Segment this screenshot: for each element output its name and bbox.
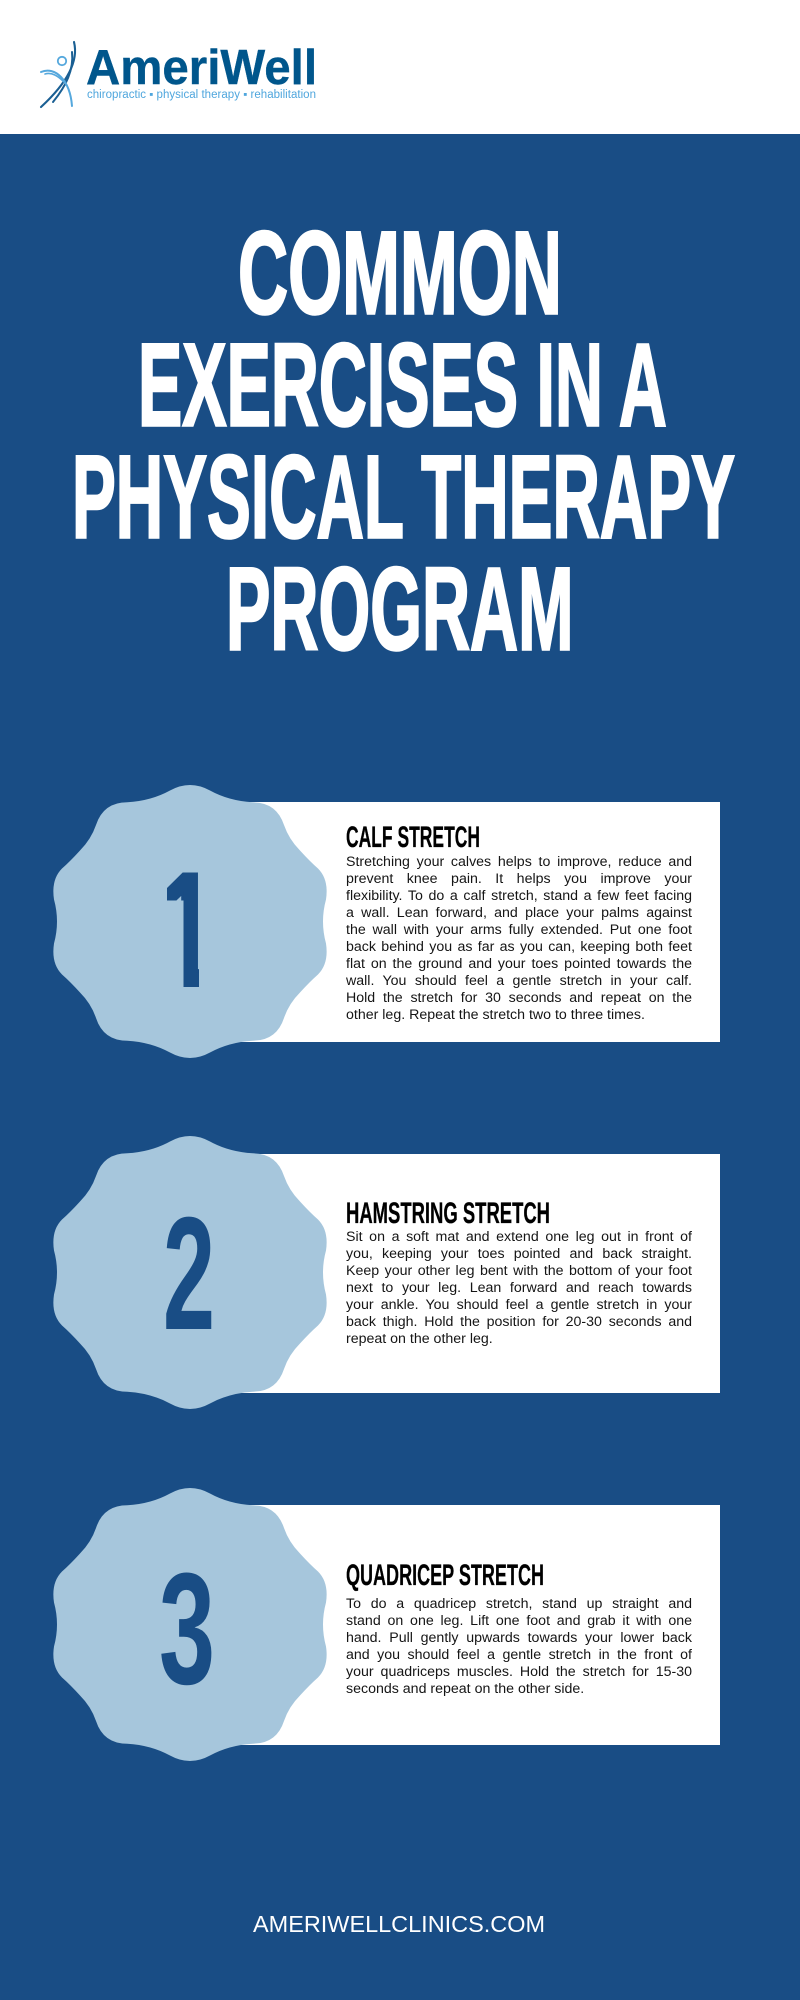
heading: HAMSTRING STRETCH bbox=[346, 1197, 550, 1230]
body text: your quadriceps muscles. Hold the stretch for 15-30 bbox=[346, 1664, 692, 1680]
title bbox=[72, 209, 736, 670]
card background bbox=[203, 1154, 720, 1393]
logo bbox=[40, 40, 317, 108]
body text bbox=[346, 854, 692, 1023]
body text: hand. Pull gently upwards towards your lower back bbox=[346, 1630, 692, 1646]
body text: repeat on the other leg. bbox=[346, 1331, 493, 1347]
body text: next to your leg. Lean forward and reach towards bbox=[346, 1280, 692, 1296]
panel: quadricep stretch bbox=[53, 1488, 720, 1761]
body text: your ankle. You should feel a gentle stretch in your bbox=[346, 1297, 692, 1313]
panel: hamstring stretch bbox=[53, 1136, 720, 1409]
body text: flat on the ground and your toes pointed towards the bbox=[346, 956, 692, 972]
body text: a wall. Lean forward, and place your palms against bbox=[346, 905, 692, 921]
body text: back behind you as far as you can, keeping both feet bbox=[346, 939, 692, 955]
body text: prevent knee pain. It helps you improve your bbox=[346, 871, 692, 887]
badge: number 1: 1 bbox=[157, 838, 217, 1022]
title: COMMON bbox=[238, 209, 562, 340]
body text: back thigh. Hold the position for 20-30 seconds and bbox=[346, 1314, 692, 1330]
body text: To do a quadricep stretch, stand up straight and bbox=[346, 1596, 692, 1612]
body text: flexibility. To do a calf stretch, stand a few feet facing bbox=[346, 888, 692, 904]
body text: stand on one leg. Lift one foot and grab it with one bbox=[346, 1613, 692, 1629]
card background bbox=[203, 802, 720, 1042]
body text: Stretching your calves helps to improve, reduce and bbox=[346, 854, 692, 870]
title: EXERCISES IN A bbox=[138, 321, 667, 452]
footer url: AMERIWELLCLINICS.COM bbox=[253, 1911, 545, 1937]
badge: number 1 bbox=[53, 785, 327, 1058]
body text: other leg. Repeat the stretch two to three times. bbox=[346, 1007, 645, 1023]
heading: CALF STRETCH bbox=[346, 821, 480, 854]
badge: number 3: 3 bbox=[159, 1540, 215, 1718]
header band bbox=[0, 0, 800, 134]
body text: Keep your other leg bent with the bottom of your foot bbox=[346, 1263, 692, 1279]
panel: calf stretch bbox=[53, 785, 720, 1058]
icon: stretching figure bbox=[41, 42, 75, 107]
body text: the wall with your arms fully extended. Put one foot bbox=[346, 922, 692, 938]
body text: Hold the stretch for 30 seconds and repeat on the bbox=[346, 990, 692, 1006]
heading: QUADRICEP STRETCH bbox=[346, 1559, 544, 1592]
body text: Sit on a soft mat and extend one leg out in front of bbox=[346, 1229, 692, 1245]
body text bbox=[346, 1596, 692, 1697]
badge: number 2: 2 bbox=[163, 1184, 215, 1364]
badge: number 3 bbox=[53, 1488, 327, 1761]
card background bbox=[203, 1505, 720, 1745]
body text: you, keeping your toes pointed and back straight. bbox=[346, 1246, 692, 1262]
logo wordmark: AmeriWell bbox=[86, 41, 317, 95]
badge: number 2 bbox=[53, 1136, 327, 1409]
body text: wall. You should feel a gentle stretch in your calf. bbox=[346, 973, 692, 989]
body text: and you should feel a gentle stretch in the front of bbox=[346, 1647, 692, 1663]
body text: seconds and repeat on the other side. bbox=[346, 1681, 584, 1697]
body text bbox=[346, 1229, 692, 1347]
logo tagline: chiropractic ▪ physical therapy ▪ rehabilitation bbox=[87, 89, 316, 101]
